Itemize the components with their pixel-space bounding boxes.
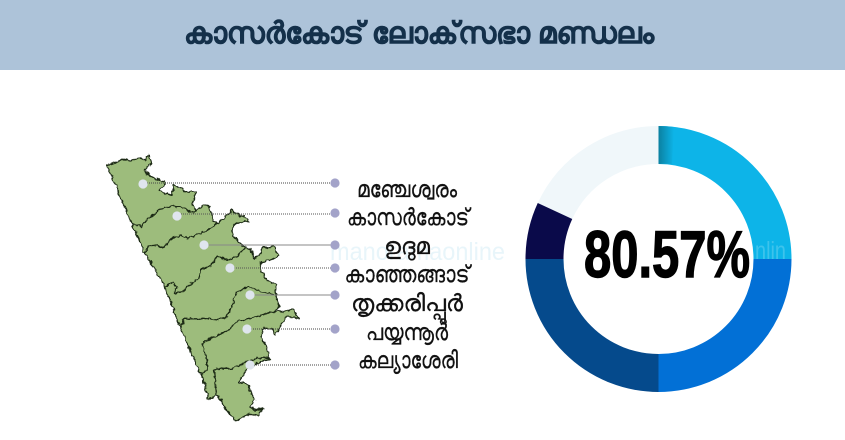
assembly segment labels: കല്യാശേരി (358, 347, 458, 374)
watermark over donut: nlin (755, 237, 786, 265)
segment: start shade (658, 126, 674, 164)
segment: navy (544, 211, 555, 259)
assembly segment labels: തൃക്കരിപ്പൂർ (351, 290, 464, 325)
label dots (330, 178, 340, 370)
segment: bright blue (658, 259, 772, 373)
segment: cyan (658, 145, 772, 259)
assembly segment labels: ഉദുമ (384, 233, 431, 260)
watermark: manoramaonline (330, 238, 505, 266)
header banner (0, 0, 845, 70)
constituency borders (132, 206, 197, 227)
map: Kasaragod constituency (107, 155, 298, 421)
segment: dark blue (544, 259, 658, 373)
assembly segment labels: കാഞ്ഞങ്ങാട് (344, 261, 472, 287)
title: കാസർകോട് ലോക്‌സഭാ മണ്ഡലം (184, 17, 655, 50)
assembly segment labels (344, 176, 472, 374)
leader lines (147, 183, 335, 365)
percentage value: 80.57% (584, 217, 750, 291)
donut chart (544, 126, 772, 373)
segment: light remainder (555, 145, 658, 211)
assembly segment labels: മഞ്ചേശ്വരം (357, 176, 457, 202)
assembly segment labels: കാസർകോട് (347, 204, 472, 230)
assembly segment labels: പയ്യന്നൂർ (366, 319, 449, 345)
map location dots (138, 179, 255, 370)
map outline (107, 155, 298, 421)
